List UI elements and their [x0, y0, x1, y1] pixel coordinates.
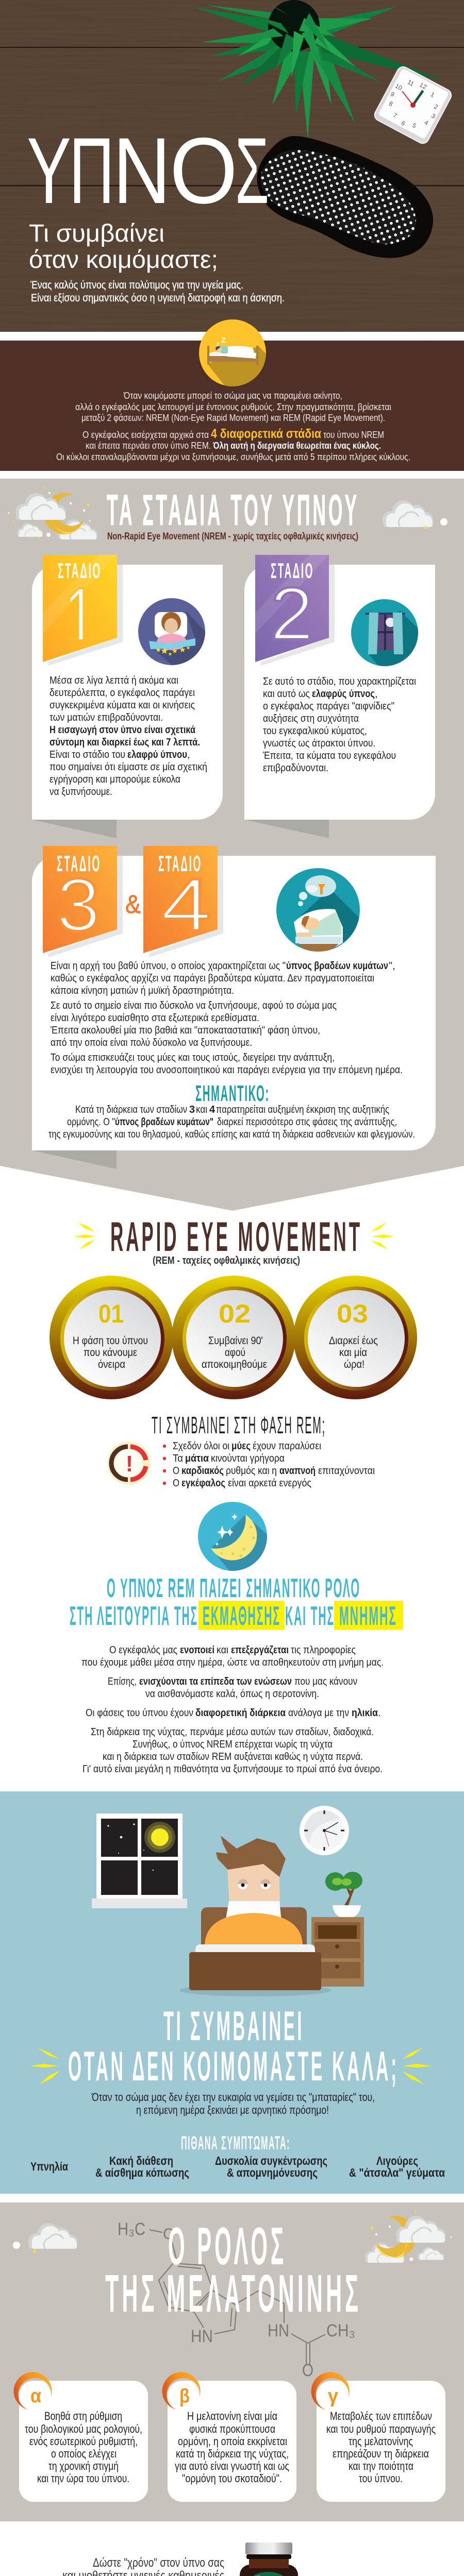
ampersand: & — [125, 890, 141, 919]
text block: important note: 4 — [209, 1104, 216, 1115]
text block: how the brain works: Όλη αυτή η διεργασία θεωρείται ένας κύκλος. — [212, 440, 381, 451]
photo: alarm clock: 3 — [430, 112, 437, 120]
intro text: Είναι εξίσου σημαντικός όσο η υγιεινή διατροφή και η άσκηση. — [31, 292, 285, 304]
chart: REM fact 03: Διαρκεί έως — [329, 1335, 378, 1347]
card: melatonin gamma: γ — [328, 2385, 338, 2407]
decoration: cloud left — [13, 2223, 77, 2253]
photo: alarm clock: 11 — [406, 78, 416, 88]
text block: how the brain works: Όταν κοιμόμαστε μπορεί το σώμα μας να παραμένει ακίνητο, — [123, 391, 342, 401]
list: symptoms: Λιγούρες — [376, 2154, 418, 2167]
list: REM effects: αναπνοή — [279, 1465, 316, 1477]
text block: how the brain works — [56, 391, 410, 462]
text block: consequences — [91, 2091, 375, 2116]
text block: stage 1: Μέσα σε λίγα λεπτά ή ακόμα και — [49, 675, 178, 686]
card: melatonin beta: "ορμόνη του σκοταδιού". — [182, 2472, 282, 2485]
list: REM effects: έχουν παραλύσει — [253, 1440, 321, 1452]
text block: stage 2: , — [375, 688, 378, 700]
text block: stages 3 and 4: κάποια κίνηση ματιών ή μυϊκή δραστηριότητα. — [51, 985, 234, 996]
text block: stage 2: ελαφρύς ύπνος — [312, 688, 375, 700]
text block: memory and REM: Συνήθως, ο ύπνος NREM επέρχεται νωρίς τη νύχτα — [132, 1739, 333, 1750]
text block: advice: Δώστε "χρόνο" στον ύπνο σας — [93, 2556, 224, 2570]
list: symptoms: Υπνηλία — [30, 2160, 68, 2173]
card: melatonin beta: ορμόνη, η οποία εκκρίνεται — [178, 2435, 287, 2448]
panel: melatonin background — [0, 2202, 464, 2521]
heading: what happens when we do not sleep well — [29, 2003, 432, 2090]
heading: role of melatonin — [105, 2216, 361, 2323]
text block: important note — [48, 1104, 415, 1140]
text block: memory and REM: Οι φάσεις του ύπνου έχουν — [86, 1707, 193, 1719]
text block: memory and REM: . — [378, 1707, 381, 1719]
title: Ο — [170, 118, 238, 223]
text block: stages 3 and 4: είναι λιγότερο ευαίσθητο στα εξωτερικά ερεθίσματα. — [51, 1012, 259, 1024]
chart: REM fact 01: όνειρα — [98, 1359, 125, 1370]
text block: stages 3 and 4: ύπνος βραδέων κυμάτων — [286, 960, 388, 972]
icon: man dreaming — [276, 868, 361, 953]
text block: stage 2: αυξήσεις στη συχνότητα — [263, 713, 359, 724]
text block: memory and REM: τις πληροφορίες — [291, 1645, 356, 1656]
text block: memory and REM: ενισχύονται τα επίπεδα των ενώσεων — [139, 1676, 292, 1687]
icon: sleeping person in bed: Z — [221, 336, 226, 345]
chart: REM fact 03: και μία — [339, 1347, 367, 1359]
text block: stage 2: του εγκεφαλικού κύματος, — [263, 725, 367, 737]
list: REM effects: μάτια — [185, 1453, 209, 1464]
photo: alarm clock: 4 — [423, 118, 429, 127]
card: melatonin beta: φυσικά προκύπτουσα — [189, 2422, 275, 2435]
text block: stages 3 and 4: ενισχύει τη λειτουργία του ανοσοποιητικού και παράγει ενέργεια για την επόμενη ημέρα. — [51, 1064, 403, 1076]
title: Σ — [235, 118, 269, 223]
heading: rapid eye movement: (REM - ταχείες οφθαλμικές κινήσεις) — [153, 1255, 300, 1266]
text block: stage 1: Είναι το στάδιο του — [49, 749, 125, 760]
icon: woman sleeping on pillow: ★ — [168, 652, 172, 656]
card: melatonin alpha: α — [30, 2385, 41, 2407]
product: Cool Night bottle — [240, 2543, 298, 2576]
text block: how the brain works: αλλά ο εγκέφαλός μας λειτουργεί με έντονους ρυθμούς. Στην πραγματικότητα, βρίσκεται — [75, 402, 391, 412]
banner: stage 2: ΣΤΑΔΙΟ — [271, 558, 314, 583]
text block: important note: διαρκεί περισσότερο στις φάσεις της ανάπτυξης, — [217, 1116, 397, 1128]
panel: lack of sleep background — [0, 1791, 464, 2194]
text block: memory and REM — [81, 1645, 384, 1775]
text block: stage 1: που σημαίνει ότι είμαστε σε μία σχετική — [49, 761, 207, 773]
title: Ν — [113, 118, 171, 223]
chart: melatonin molecule: HN — [191, 2327, 213, 2346]
list: symptoms: Δυσκολία συγκέντρωσης — [215, 2154, 327, 2167]
text block: important note: ορμόνης. Ο " — [67, 1116, 115, 1128]
hero: wood background — [0, 0, 464, 332]
chart: melatonin molecule: H₃C — [118, 2219, 145, 2239]
text block: stage 1: να ξυπνήσουμε. — [49, 786, 112, 798]
panel: stage 2 — [244, 555, 435, 838]
icon: woman sleeping on pillow: ★ — [172, 648, 177, 654]
list: REM effects: μύες — [231, 1440, 251, 1452]
icon: woman sleeping on pillow: ★ — [186, 646, 190, 650]
illustration: wall clock — [300, 1806, 349, 1855]
card: melatonin gamma: και του ρυθμού παραγωγής — [326, 2422, 436, 2435]
subtitle — [29, 220, 218, 274]
text block: memory and REM: Γι' αυτό είναι μεγάλη η πιθανότητα να ξυπνήσουμε το πρωί από ένα όνειρο. — [82, 1764, 383, 1775]
text block: important note: ύπνος βραδέων κυμάτων" — [115, 1116, 213, 1128]
chart: melatonin molecule: O — [163, 2226, 175, 2243]
text block: how the brain works: και έπειτα περνάει στον ύπνο REM. — [86, 440, 211, 451]
text block: stages 3 and 4: ", — [389, 960, 395, 972]
list: REM effects: είναι αρκετά ενεργός — [228, 1478, 311, 1489]
card: melatonin gamma: επηρεάζουν τη διάρκεια — [333, 2447, 429, 2460]
text block: advice — [46, 2556, 224, 2576]
heading: REM role in learning and memory — [70, 1573, 403, 1631]
banner: stage 1 — [43, 555, 123, 666]
photo: alarm clock: 8 — [388, 100, 394, 108]
text block: memory and REM: Επίσης, — [108, 1676, 137, 1687]
text: ΠΙΘΑΝΑ ΣΥΜΠΤΩΜΑΤΑ: — [181, 2132, 290, 2154]
text block: important note: 3 — [189, 1104, 195, 1115]
panel: NREM stages background — [0, 479, 464, 1211]
banner: stage 2: 2 — [270, 572, 313, 655]
text block: memory and REM: που μας κάνουν — [294, 1676, 357, 1687]
card: melatonin beta: κατά τη διάρκεια της νύχτας, — [176, 2447, 289, 2460]
card: melatonin beta: Η μελατονίνη είναι μία — [187, 2410, 277, 2422]
list: REM effects: εγκέφαλος — [181, 1478, 225, 1489]
text block: how the brain works: 4 διαφορετικά στάδια — [211, 427, 322, 441]
list: REM effects: Ο — [173, 1465, 179, 1477]
chart: REM fact 02: αποκοιμηθούμε — [202, 1359, 267, 1370]
text block: important note: και — [196, 1104, 207, 1115]
text block: memory and REM: επεξεργάζεται — [231, 1645, 289, 1656]
decoration: moon and clouds right — [365, 2210, 452, 2263]
icon: sleeping person in bed — [199, 319, 266, 386]
chart: REM fact 02: Συμβαίνει 90' — [208, 1335, 263, 1347]
chart: REM fact 01 — [49, 1276, 173, 1399]
list: symptoms: & απομνημόνευσης — [227, 2166, 318, 2179]
text block: stage 2: γνωστές ως άτρακτοι ύπνου. — [263, 738, 375, 749]
subtitle: όταν κοιμόμαστε; — [29, 246, 218, 274]
chart: REM fact 01: 01 — [98, 1299, 124, 1328]
panel: stages 3 and 4: ΣΗΜΑΝΤΙΚΟ: — [195, 1081, 270, 1106]
text block: stage 2: επιβραδύνονται. — [263, 762, 328, 774]
list: symptoms: & αίσθημα κόπωσης — [95, 2166, 189, 2179]
text block: stages 3 and 4: Σε αυτό το σημείο είναι πιο δύσκολο να ξυπνήσουμε, αφού το σώμα μας — [51, 1000, 337, 1011]
list: REM effects: κινούνται γρήγορα — [211, 1453, 285, 1464]
panel: stages 3 and 4 — [32, 846, 436, 1169]
heading: stages of sleep — [107, 486, 359, 542]
text block: consequences: η επόμενη ημέρα ξεκινάει με αρνητικό πρόσημο! — [136, 2104, 329, 2116]
banner: stage 1: ΣΤΑΔΙΟ — [58, 558, 102, 583]
illustration: night window — [92, 1814, 187, 1908]
photo: alarm clock: 1 — [429, 91, 436, 98]
subtitle: Τι συμβαίνει — [29, 220, 164, 247]
banner: stage 1: 1 — [64, 570, 95, 663]
icon: night window — [351, 599, 418, 666]
list: symptoms: Κακή διάθεση — [109, 2154, 173, 2167]
card: melatonin gamma: του ύπνου. — [359, 2472, 403, 2485]
photo: sleep mask — [257, 136, 433, 258]
banner: stage 3: ΣΤΑΔΙΟ — [57, 851, 101, 876]
panel: brown intro band — [0, 319, 464, 471]
banner: stage 4: ΣΤΑΔΙΟ — [158, 851, 202, 876]
chart: REM fact 01: Η φάση του ύπνου — [73, 1335, 148, 1347]
card: melatonin gamma: Μεταβολές των επιπέδων — [330, 2410, 432, 2422]
chart: REM fact 01: που κάνουμε — [84, 1347, 137, 1359]
text block: stage 2: Έπειτα, τα κύματα του εγκεφάλου — [262, 750, 396, 761]
text block: stage 1 — [49, 675, 207, 798]
banner: stage 4 — [143, 846, 223, 957]
text block: stage 2: και αυτό ως — [263, 688, 310, 700]
photo: alarm clock: 12 — [419, 81, 428, 91]
list: symptoms — [30, 2154, 445, 2179]
card: melatonin beta — [162, 2372, 296, 2502]
list: REM effects: καρδιακός — [181, 1465, 224, 1477]
title: Υ — [27, 118, 71, 223]
chart: REM fact 02 — [172, 1276, 295, 1399]
chart: melatonin molecule: HN — [268, 2321, 289, 2341]
list: REM effects: επιταχύνονται — [318, 1465, 375, 1477]
text block: stage 1: εγρήγορση και μπορούμε εύκολα — [49, 774, 180, 785]
text block: how the brain works: Ο εγκέφαλος εισέρχεται αρχικά στα — [82, 430, 209, 440]
photo: alarm clock: 6 — [400, 120, 407, 127]
card: melatonin beta: για αυτό είναι γνωστή και ως — [175, 2460, 289, 2472]
card: melatonin gamma: και την ποιότητα — [349, 2460, 413, 2472]
card: melatonin alpha — [14, 2372, 148, 2502]
text block: stages 3 and 4: Έπειτα ακολουθεί μία πιο βαθιά και "αποκαταστατική" φάση ύπνου, — [50, 1025, 320, 1036]
list: REM effects: Σχεδόν όλοι οι — [173, 1440, 229, 1452]
text block: important note: παρατηρείται αυξημένη έκκριση της αυξητικής — [216, 1104, 389, 1115]
chart: melatonin molecule: CH₃ — [326, 2321, 355, 2341]
text block: memory and REM: Στη διάρκεια της νύχτας, περνάμε μέσω αυτών των σταδίων, διαδοχικά. — [91, 1726, 374, 1738]
chart: REM fact 02: αφού — [225, 1347, 245, 1359]
icon: sleeping person in bed: Z — [217, 342, 220, 347]
intro text: Ένας καλός ύπνος είναι πολύτιμος για την υγεία μας. — [30, 279, 243, 291]
chart: melatonin molecule — [118, 2219, 355, 2380]
illustration: tired man in bed — [179, 1836, 331, 1996]
card: melatonin alpha: ενός εσωτερικού ρυθμιστή, — [29, 2435, 138, 2448]
banner: stage 4: 4 — [161, 863, 211, 946]
text block: memory and REM: και — [217, 1645, 228, 1656]
text block: stage 2: ο εγκέφαλος παράγει "αιφνίδιες" — [263, 701, 394, 712]
photo: alarm clock: 2 — [433, 103, 439, 111]
card: melatonin alpha: του βιολογικού μας ρολογιού, — [25, 2422, 142, 2435]
title — [27, 118, 269, 223]
text block: memory and REM: και η διάρκεια των σταδίων REM αυξάνεται καθώς η νύχτα περνά. — [103, 1751, 363, 1762]
text block: stage 1: Η εισαγωγή στον ύπνο είναι σχετικά — [49, 724, 196, 736]
icon: moon and stars — [198, 1502, 271, 1574]
text block: memory and REM: που έχουμε μάθει μέσα στην ημέρα, ώστε να αποθηκευτούν στη μνήμη μας. — [81, 1657, 384, 1668]
heading: REM role in learning and memory: ΕΚΜΑΘΗΣΗΣ — [203, 1601, 280, 1631]
text block: how the brain works: του ύπνου NREM — [323, 430, 384, 440]
heading: role of melatonin: Ο ΡΟΛΟΣ — [168, 2216, 287, 2276]
decoration: cloud right — [383, 500, 448, 529]
text block: stage 2 — [262, 676, 416, 774]
text block: stages 3 and 4: Το σώμα επισκευάζει τους μύες και τους ιστούς, διεγείρει την ανάπτυξη, — [51, 1052, 335, 1063]
photo: alarm clock: 9 — [389, 90, 396, 98]
chart: REM fact 02: 02 — [219, 1299, 251, 1328]
text block: memory and REM: διαφορετική διάρκεια — [195, 1707, 286, 1719]
list: REM effects: Τα — [173, 1453, 183, 1464]
text block: stage 1: δευτερόλεπτα, ο εγκέφαλος παράγει — [49, 687, 195, 699]
chart: melatonin molecule: O — [302, 2361, 313, 2380]
text block: stages 3 and 4: Είναι η αρχή του βαθύ ύπνου, ο οποίος χαρακτηρίζεται ως " — [51, 960, 286, 972]
card: melatonin alpha: Βοηθά στη ρύθμιση — [44, 2410, 122, 2422]
text block: memory and REM: ανάλογα με την — [288, 1707, 349, 1719]
panel: stage 1 — [32, 555, 223, 838]
text block: stage 1: ελαφρύ ύπνου — [127, 749, 187, 760]
list: REM effects: Ο — [173, 1478, 179, 1489]
decoration: moon and clouds left — [8, 487, 97, 539]
text block: memory and REM: να αισθανόμαστε καλά, όπως η σεροτονίνη. — [145, 1688, 319, 1700]
card: melatonin gamma — [311, 2372, 445, 2502]
card: melatonin beta: β — [179, 2385, 190, 2407]
heading: stages of sleep: Non-Rapid Eye Movement (NREM - χωρίς ταχείες οφθαλμικές κινήσεις) — [107, 531, 358, 542]
banner: stage 2 — [255, 555, 335, 666]
heading: REM role in learning and memory: ΚΑΙ ΤΗΣ — [285, 1601, 335, 1631]
text block: memory and REM: ενοποιεί — [180, 1645, 214, 1656]
card: melatonin alpha: τη χρονική στιγμή — [48, 2460, 119, 2472]
text block: consequences: Όταν το σώμα μας δεν έχει την ευκαιρία να γεμίσει τις "μπαταρίες" του, — [91, 2091, 375, 2104]
intro text — [30, 279, 285, 304]
text block: stage 1: σύντομη και διαρκεί έως και 7 λεπτά. — [49, 737, 200, 748]
heading: rapid eye movement — [74, 1214, 394, 1266]
text block: stage 2: Σε αυτό το στάδιο, που χαρακτηρίζεται — [263, 676, 416, 687]
text block: stages 3 and 4 — [50, 960, 403, 1076]
photo: alarm clock — [373, 65, 453, 145]
text block: how the brain works: μεταξύ 2 φάσεων: NREM (Non-Eye Rapid Movement) και REM (Rapid Eye Movement). — [81, 413, 385, 423]
illustration: nightstand and plant — [311, 1872, 364, 1987]
icon: woman sleeping on pillow — [138, 598, 205, 665]
banner: stage 3: 3 — [57, 863, 100, 946]
text block: important note: Κατά τη διάρκεια των σταδίων — [75, 1104, 187, 1115]
text block: stages 3 and 4: από την οποία είναι πολύ δύσκολο να ξυπνήσουμε. — [51, 1037, 252, 1048]
text block: memory and REM: ηλικία — [352, 1707, 378, 1719]
icon: woman sleeping on pillow: ★ — [160, 647, 169, 655]
text block: stage 1: , — [187, 749, 190, 760]
chart: REM fact 03 — [293, 1276, 417, 1399]
chart: REM fact 03: ώρα! — [344, 1359, 364, 1370]
list: symptoms: & "άτσαλα" γεύματα — [349, 2166, 445, 2179]
list: REM effects: ρυθμός και η — [226, 1465, 277, 1477]
photo: alarm clock: 10 — [394, 82, 404, 92]
text block: memory and REM: Ο εγκέφαλός μας — [109, 1645, 177, 1656]
chart: REM fact 03: 03 — [337, 1299, 368, 1328]
icon: woman sleeping on pillow: ★ — [156, 647, 161, 653]
list: REM effects — [163, 1440, 375, 1489]
photo: alarm clock: 7 — [392, 111, 399, 120]
text block: stages 3 and 4: καθώς ο εγκέφαλος αρχίζει να παράγει βραδύτερα κύματα. Δεν πραγματοποιείται — [51, 973, 374, 984]
banner: stage 3 — [43, 846, 123, 957]
card: melatonin gamma: της μελατονίνης — [349, 2435, 413, 2448]
text block: how the brain works: Οι κύκλοι επαναλαμβάνονται μέχρι να ξυπνήσουμε, συνήθως μετά από 5 περίπου πλήρεις κύκλους. — [56, 452, 410, 462]
photo: plant — [192, 0, 445, 139]
heading: REM role in learning and memory: ΣΤΗ ΛΕΙΤΟΥΡΓΙΑ ΤΗΣ — [70, 1601, 198, 1631]
icon: woman sleeping on pillow: ★ — [179, 646, 186, 653]
text block: stage 1: των ματιών επιβραδύνονται. — [49, 712, 163, 723]
title: Π — [69, 118, 114, 223]
icon: alert — [107, 1442, 151, 1485]
photo: alarm clock: 5 — [411, 122, 418, 130]
card: melatonin alpha: και την ώρα του ύπνου. — [37, 2472, 129, 2485]
text block: stage 1: συγκεκριμένα κύματα και οι κινήσεις — [49, 700, 195, 711]
icon: alert: ! — [126, 1451, 133, 1477]
card: melatonin alpha: ο οποίος ελέγχει — [51, 2447, 117, 2460]
